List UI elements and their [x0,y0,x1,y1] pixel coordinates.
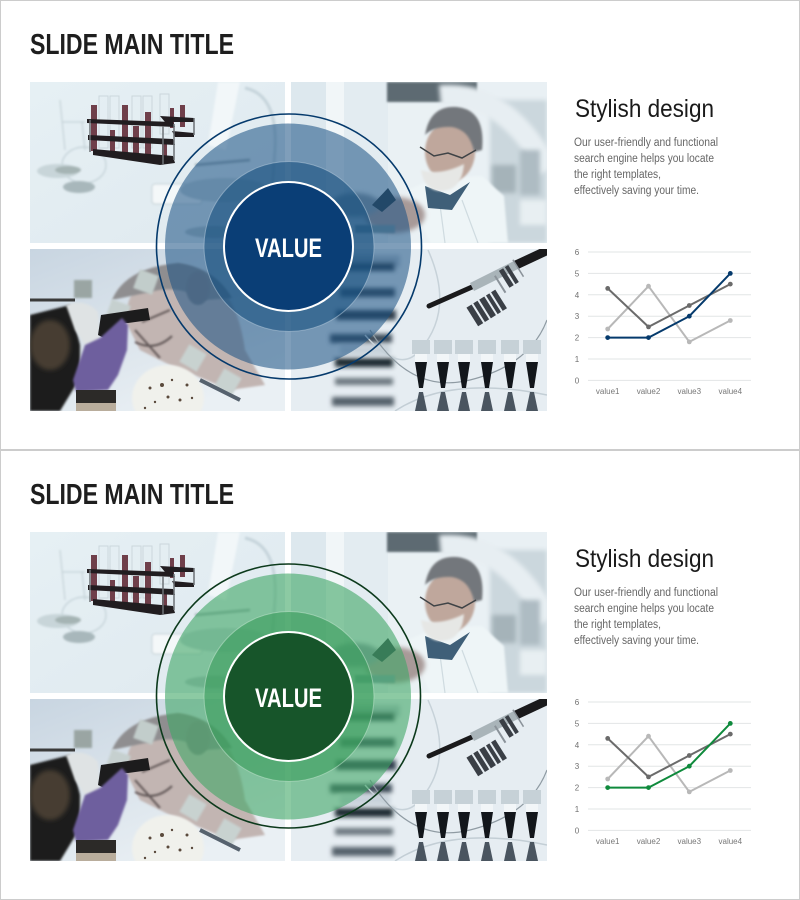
circular value diagram: VALUE [255,233,322,263]
slide background [0,0,800,450]
body text: effectively saving your time. [574,635,699,647]
body text [574,587,718,647]
body text: the right templates, [574,169,661,181]
photo: pipette and sample tubes [291,699,548,861]
line chart: 3 [575,312,580,321]
line chart: 0 [575,826,580,835]
body text: the right templates, [574,619,661,631]
photo: scientist with glasses [291,532,548,693]
line chart: 5 [575,719,580,728]
line chart: value2 [637,387,661,396]
line chart: 1 [575,805,580,814]
photo: scientist with glasses [291,82,548,243]
body text: search engine helps you locate [574,603,714,615]
title: SLIDE MAIN TITLE [30,479,234,511]
line chart: 2 [575,784,580,793]
slide 1: blue [30,29,751,431]
line chart: 2 [575,334,580,343]
line chart: 4 [575,291,580,300]
body text [574,137,718,197]
photo: pipette and sample tubes [291,249,548,411]
heading: Stylish design [575,545,714,573]
line chart: value3 [678,837,702,846]
body text: Our user-friendly and functional [574,587,718,599]
body text: effectively saving your time. [574,185,699,197]
line chart: value4 [719,837,743,846]
line chart: 4 [575,741,580,750]
slide 2: green [30,479,751,881]
title: SLIDE MAIN TITLE [30,29,234,61]
line chart [575,698,751,846]
line chart: 6 [575,248,580,257]
line chart: value1 [596,837,620,846]
line chart: 5 [575,269,580,278]
line chart: value2 [637,837,661,846]
body text: Our user-friendly and functional [574,137,718,149]
slide 2 background [0,450,800,900]
photo: researcher at microscope [30,699,285,881]
line chart: 1 [575,355,580,364]
line chart: value3 [678,387,702,396]
line chart: value1 [596,387,620,396]
line chart [575,248,751,396]
circular value diagram: VALUE [255,683,322,713]
circular value diagram [156,114,422,379]
heading: Stylish design [575,95,714,123]
line chart: 0 [575,376,580,385]
line chart: 6 [575,698,580,707]
body text: search engine helps you locate [574,153,714,165]
photo: test tube rack [30,532,285,693]
line chart: 3 [575,762,580,771]
photo: test tube rack [30,82,285,243]
line chart: value4 [719,387,743,396]
circular value diagram [156,564,420,828]
photo: researcher at microscope [30,249,285,431]
